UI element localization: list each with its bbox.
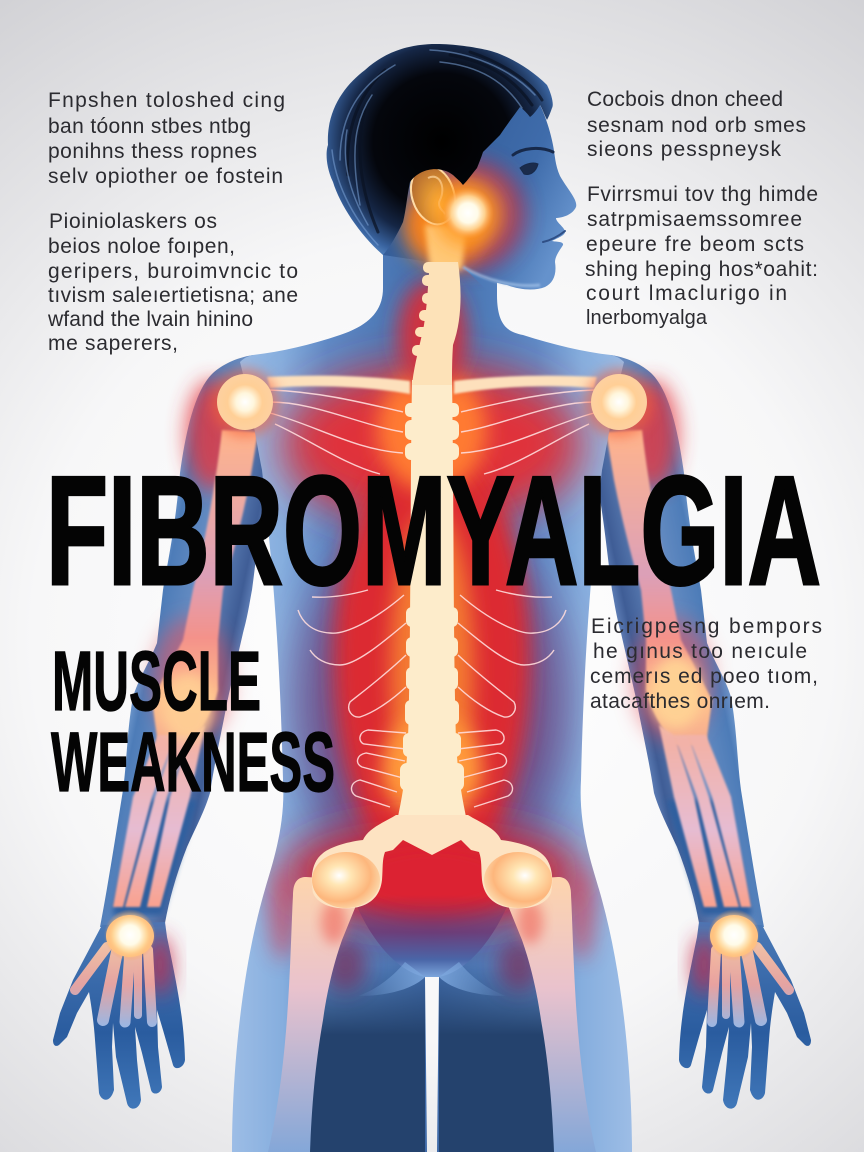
left humerus and elbow (152, 430, 258, 745)
text block: lower right: Eicrigpesng bempors (591, 615, 822, 638)
skeleton: femurs (268, 877, 596, 1152)
text block: top right, paragraph 2: Fvirrsmui tov thg himde (587, 183, 818, 206)
cervical spine (412, 262, 461, 385)
text block: lower right (590, 615, 822, 713)
text block: top left, paragraph 2: Pioiniolaskers os (49, 210, 217, 233)
subtitle: WEAKNESS (51, 715, 335, 809)
icon: jaw pain glow (442, 187, 494, 239)
skeleton: ribs (270, 390, 594, 807)
left arm and hand (53, 355, 270, 1109)
hair strands (332, 50, 542, 245)
icon: left wrist pain glow (104, 909, 156, 961)
text block: lower right: atacafthes onrıem. (590, 690, 770, 713)
icon: left shoulder glow (217, 374, 273, 430)
text block: top right, paragraph 2: epeure fre beom scts (586, 233, 804, 256)
text block: top left, paragraph 2: me saperers, (48, 332, 178, 355)
text block: top right, paragraph 1 (587, 88, 806, 161)
text block: top left, paragraph 1: Fnpshen toloshed cing (48, 89, 285, 112)
text block: top left, paragraph 2: wfand the lvain hinino (47, 308, 253, 331)
skeleton: pelvis (312, 815, 552, 908)
text block: top left, paragraph 1: ponihns thess ropnes (48, 140, 257, 163)
text block: top left, paragraph 2: beios noloe foıpen, (48, 235, 235, 258)
head (327, 44, 576, 385)
text block: top right, paragraph 2: court lmaclurigo in (586, 282, 787, 305)
right forearm bones (659, 725, 751, 907)
text block: top left, paragraph 1: selv opiother oe fostein (48, 165, 283, 188)
jaw highlight (463, 267, 540, 286)
text block: top left, paragraph 2: geripers, buroimvncic to (48, 260, 298, 283)
neck pain glow (403, 160, 525, 270)
torso and legs (232, 255, 632, 1152)
left forearm bones (113, 725, 205, 907)
text block: top left, paragraph 1: ban tóonn stbes ntbg (48, 115, 251, 138)
skeleton: spine (395, 380, 469, 830)
icon: right shoulder glow (591, 374, 647, 430)
text block: lower right: he gınus too neıcule (593, 640, 807, 663)
subtitle: MUSCLE (52, 634, 261, 728)
text block: top left, paragraph 2 (47, 210, 298, 355)
text block: top right, paragraph 1: Cocbois dnon cheed (587, 88, 783, 111)
text block: top right, paragraph 2: shing heping hos*oahit: (585, 258, 818, 281)
right arm and hand (594, 355, 811, 1109)
text block: lower right: cemerıs ed poeo tıom, (590, 665, 818, 688)
hair (327, 44, 553, 255)
text block: top left, paragraph 1 (48, 89, 285, 188)
text block: top left, paragraph 2: tıvism saleıertietisna; ane (48, 284, 298, 307)
icon: right hip glow (484, 852, 552, 908)
icon: right wrist pain glow (708, 909, 760, 961)
icon: ear (404, 160, 462, 230)
right humerus and elbow (606, 430, 712, 745)
subtitle (51, 634, 335, 809)
text block: top right, paragraph 2 (585, 183, 818, 329)
right hand outline (679, 922, 811, 1109)
text block: top right, paragraph 1: sesnam nod orb smes (587, 114, 806, 137)
text block: top right, paragraph 2: satrpmisaemssomree (587, 208, 802, 231)
text block: top right, paragraph 1: sieons pesspneysk (587, 138, 782, 161)
face details (513, 148, 565, 242)
skeleton: clavicles and shoulder joints (211, 369, 653, 437)
belly shield (358, 898, 506, 977)
left hand outline (53, 922, 185, 1109)
text block: top right, paragraph 2: lnerbomyalga (586, 307, 708, 329)
icon: left hip glow (312, 852, 380, 908)
